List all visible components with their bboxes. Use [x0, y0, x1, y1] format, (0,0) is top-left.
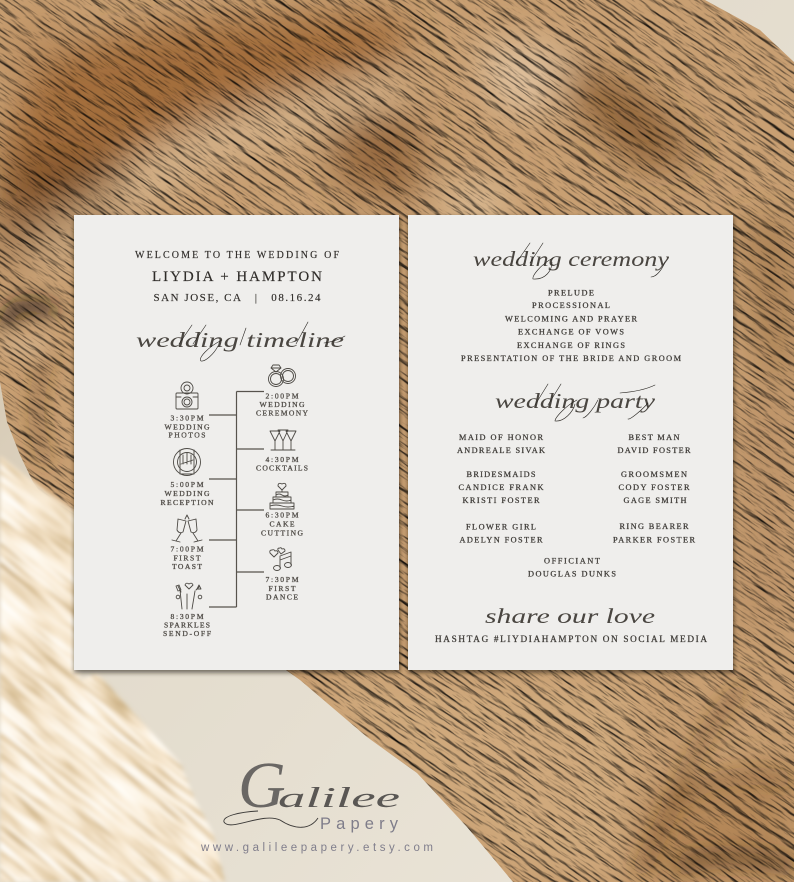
- timeline item: first toast: TOAST: [172, 562, 202, 571]
- timeline item: first dance: 7:30PM: [266, 575, 299, 584]
- timeline item: wedding reception: WEDDING: [164, 489, 210, 498]
- panel: ceremony and party card: [408, 215, 733, 670]
- logo: Galilee Papery: G: [238, 749, 286, 822]
- text: groom's party: [613, 433, 695, 544]
- timeline item: cake cutting: 6:30PM: [266, 510, 299, 520]
- timeline item: wedding reception: RECEPTION: [160, 498, 214, 507]
- text: groom's party: PARKER FOSTER: [613, 536, 695, 544]
- text: bride's party: BRIDESMAIDS: [466, 470, 536, 479]
- timeline item: wedding ceremony: CEREMONY: [256, 408, 309, 418]
- text: ceremony order: EXCHANGE OF VOWS: [518, 328, 624, 336]
- icon: sparklers: [176, 583, 202, 609]
- script heading: wedding timeline: [136, 322, 345, 361]
- timeline item: wedding ceremony: 2:00PM: [266, 392, 299, 400]
- timeline item: wedding ceremony: [256, 365, 309, 418]
- icon: cocktail glasses: [270, 430, 296, 450]
- text: bride's party: CANDICE FRANK: [458, 483, 544, 492]
- text: groom's party: DAVID FOSTER: [618, 446, 691, 455]
- timeline item: first dance: FIRST: [268, 584, 296, 593]
- text: hashtag: HASHTAG #LIYDIAHAMPTON ON SOCIAL MEDIA: [435, 634, 707, 644]
- timeline item: first toast: [170, 515, 204, 571]
- script heading: share our love: share our love: [485, 604, 655, 628]
- timeline item: wedding photos: WEDDING: [164, 422, 210, 432]
- text: ceremony order: PRESENTATION OF THE BRIDE AND GROOM: [461, 354, 682, 363]
- timeline item: first dance: [266, 548, 299, 602]
- timeline item: wedding reception: 5:00PM: [170, 480, 204, 489]
- text: ceremony order: EXCHANGE OF RINGS: [517, 341, 625, 350]
- text: officiant: DOUGLAS DUNKS: [528, 570, 616, 578]
- script heading: wedding timeline: wedding timeline: [136, 328, 344, 352]
- timeline item: sparkles send-off: 8:30PM: [170, 612, 204, 621]
- timeline item: cake cutting: CUTTING: [261, 528, 304, 538]
- text: groom's party: GAGE SMITH: [624, 496, 686, 505]
- panel: wedding timeline card: [74, 215, 399, 670]
- card shadows: [74, 217, 734, 673]
- logo: Galilee Papery: [200, 749, 433, 854]
- script heading: wedding party: wedding party: [495, 389, 656, 413]
- timeline item: first toast: 7:00PM: [170, 544, 204, 554]
- timeline item: wedding photos: PHOTOS: [168, 430, 206, 440]
- text: ceremony order: PROCESSIONAL: [532, 301, 610, 310]
- text: bride's party: MAID OF HONOR: [459, 433, 543, 442]
- text: ceremony order: WELCOMING AND PRAYER: [505, 314, 637, 324]
- timeline item: wedding photos: [164, 382, 210, 440]
- timeline item: wedding ceremony: WEDDING: [260, 400, 305, 409]
- text: bride's party: ANDREALE SIVAK: [457, 446, 545, 455]
- heading: couple names: LIYDIA + HAMPTON: [152, 269, 322, 285]
- icon: camera: [176, 382, 198, 409]
- logo: Galilee Papery: alilee: [278, 783, 400, 814]
- text: location and date: SAN JOSE, CA | 08.16.24: [154, 292, 321, 304]
- text: groom's party: GROOMSMEN: [621, 470, 687, 479]
- text: officiant: OFFICIANT: [544, 556, 600, 566]
- text: bride's party: ADELYN FOSTER: [460, 536, 543, 544]
- text: ceremony order: PRELUDE: [548, 288, 594, 298]
- timeline item: cocktails: [256, 430, 308, 472]
- icon: music notes and hearts: [270, 548, 292, 570]
- script heading: wedding ceremony: wedding ceremony: [473, 247, 670, 271]
- timeline item: first toast: FIRST: [174, 554, 201, 562]
- timeline item: wedding reception: [160, 448, 214, 507]
- timeline connector lines: [209, 392, 264, 607]
- timeline item: sparkles send-off: [163, 583, 211, 638]
- timeline item: cocktails: 4:30PM: [266, 455, 299, 464]
- timeline item: sparkles send-off: SPARKLES: [164, 620, 210, 630]
- timeline item: cake cutting: CAKE: [270, 520, 295, 528]
- text: groom's party: BEST MAN: [628, 433, 680, 442]
- text: officiant: [528, 556, 616, 578]
- text: ceremony order: [461, 288, 682, 363]
- background: pampas grass: [0, 440, 240, 882]
- timeline item: wedding photos: 3:30PM: [170, 414, 204, 422]
- text: groom's party: CODY FOSTER: [618, 483, 690, 492]
- icon: champagne flutes: [172, 515, 202, 542]
- script heading: wedding ceremony: [473, 243, 670, 279]
- logo: Galilee Papery: Papery: [320, 815, 399, 833]
- timeline item: cocktails: COCKTAILS: [256, 464, 308, 472]
- logo: Galilee Papery: www.galileepapery.etsy.com: [200, 842, 433, 854]
- text: bride's party: KRISTI FOSTER: [462, 496, 540, 505]
- text: bride's party: [457, 433, 545, 544]
- timeline item: cake cutting: [261, 483, 304, 538]
- timeline item: first dance: DANCE: [266, 592, 298, 602]
- text: groom's party: RING BEARER: [620, 522, 689, 531]
- text: bride's party: FLOWER GIRL: [466, 522, 536, 532]
- heading: welcome: WELCOME TO THE WEDDING OF: [135, 250, 339, 261]
- icon: tiered cake: [270, 483, 294, 509]
- timeline item: sparkles send-off: SEND-OFF: [163, 629, 211, 638]
- icon: reception badge: [174, 448, 200, 476]
- icon: rings: [268, 365, 296, 386]
- script heading: wedding party: [495, 384, 656, 421]
